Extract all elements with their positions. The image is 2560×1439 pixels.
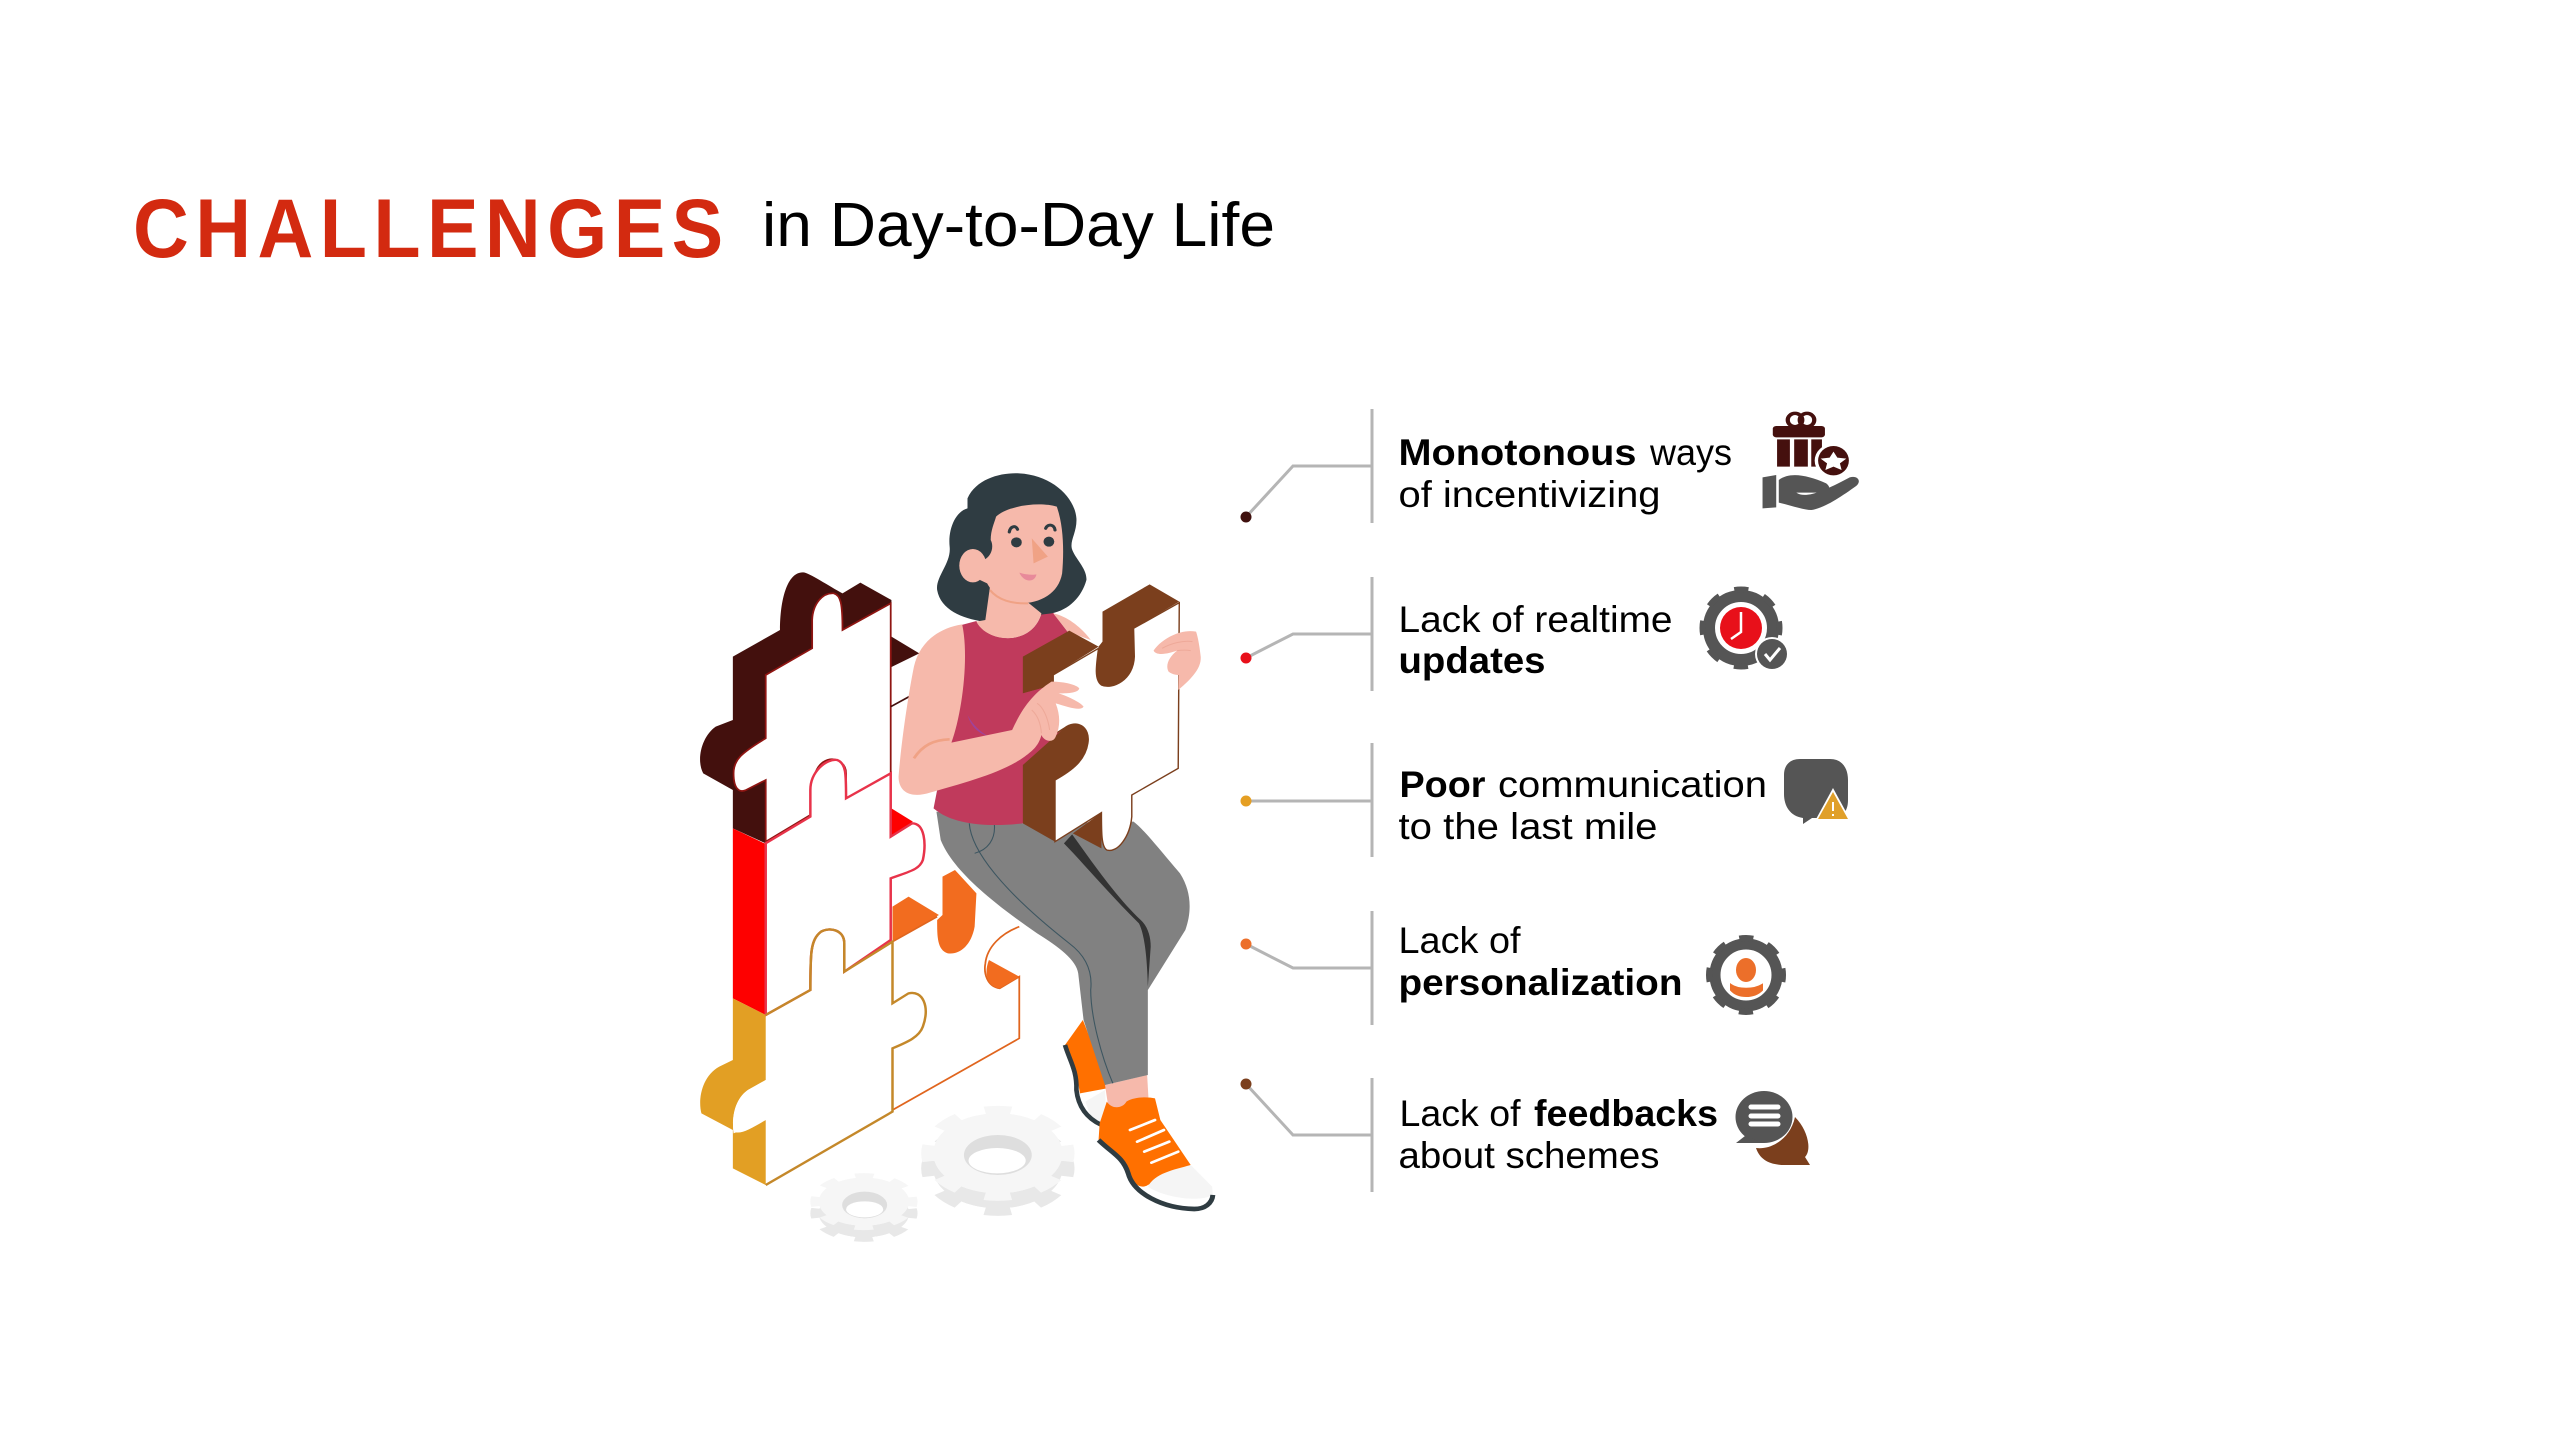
back shoe xyxy=(1065,1020,1107,1127)
front shoe xyxy=(1099,1097,1213,1209)
text 1: of incentivizing xyxy=(1398,474,1660,515)
icon: speech bubble with warning xyxy=(1784,759,1851,824)
connector 4 xyxy=(1240,911,1372,1025)
trousers xyxy=(936,812,1190,1085)
text 1: ways xyxy=(1649,432,1732,473)
text 5: feedbacks xyxy=(1534,1093,1718,1134)
face xyxy=(959,504,1063,603)
ankle xyxy=(1105,1075,1149,1108)
puzzle piece: brown, held by the woman xyxy=(1023,584,1179,850)
text 5 xyxy=(1398,1093,1718,1176)
text 5: about schemes xyxy=(1398,1135,1660,1176)
text 5: Lack of xyxy=(1400,1093,1521,1134)
text 2 xyxy=(1398,599,1672,681)
text 3: to the last mile xyxy=(1398,806,1658,847)
text 1: Monotonous xyxy=(1398,432,1636,473)
title: CHALLENGES xyxy=(133,182,730,276)
text 4 xyxy=(1398,920,1682,1003)
text 3: communication xyxy=(1498,764,1767,805)
icon: gear with person xyxy=(1709,938,1783,1012)
far hand xyxy=(1154,631,1201,690)
icon: gift in hand xyxy=(1763,413,1859,510)
icon: gear with clock xyxy=(1702,590,1789,671)
puzzle piece: red xyxy=(733,760,924,1015)
puzzle piece: gold xyxy=(700,929,926,1185)
woman xyxy=(899,473,1213,1209)
tank top xyxy=(934,613,1067,825)
puzzle piece: dark maroon xyxy=(700,572,919,843)
connector 1 xyxy=(1240,409,1372,523)
gears on the floor: top faces xyxy=(819,1113,1062,1226)
callout: lack of personalization xyxy=(1240,911,1783,1025)
title: in Day-to-Day Life xyxy=(762,191,1275,260)
callout: poor communication to the last mile xyxy=(1240,743,1851,857)
near arm and hand xyxy=(899,624,1084,795)
neck xyxy=(976,587,1041,638)
text 3 xyxy=(1398,764,1767,847)
callout: lack of realtime updates xyxy=(1240,577,1789,691)
far shoulder xyxy=(1053,613,1091,640)
callout: lack of feedbacks about schemes xyxy=(1240,1078,1810,1192)
text 2: updates xyxy=(1398,640,1546,681)
illustration: woman holding puzzle pieces xyxy=(700,473,1213,1237)
title xyxy=(133,182,1275,276)
icon: two chat bubbles xyxy=(1736,1091,1810,1165)
text 3: Poor xyxy=(1400,764,1486,805)
text 2: Lack of realtime xyxy=(1398,599,1672,640)
text 4: personalization xyxy=(1398,962,1682,1003)
connector 2 xyxy=(1240,577,1372,691)
callout: monotonous ways of incentivizing xyxy=(1240,409,1859,523)
hair xyxy=(937,473,1086,622)
puzzle piece: orange xyxy=(892,870,1019,1110)
text 1 xyxy=(1398,432,1732,515)
connector 5 xyxy=(1240,1078,1372,1192)
connector 3 xyxy=(1240,743,1372,857)
text 4: Lack of xyxy=(1398,920,1521,961)
gears on the floor: side faces xyxy=(819,1128,1062,1237)
